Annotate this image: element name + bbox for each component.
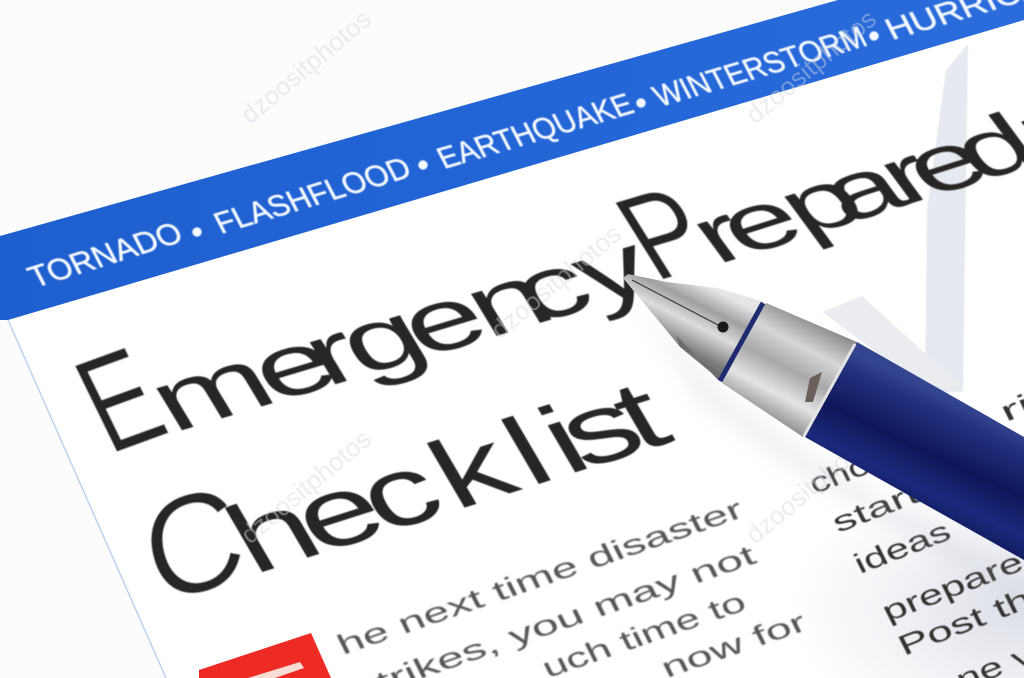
banner labels	[22, 0, 1024, 294]
pen nib	[623, 274, 765, 380]
text block: right column: prepare	[877, 547, 1024, 628]
watermarks: dzoositphotos	[235, 3, 377, 130]
text block: intro paragraph: he next time disaster	[332, 494, 749, 661]
pen shadow	[640, 300, 1024, 600]
drop cap: red box	[199, 633, 331, 678]
banner labels: WINTERSTORM	[647, 19, 872, 113]
text block: right column: ideas	[849, 516, 956, 580]
text block: right column: cho	[804, 450, 876, 500]
banner labels: EARTHQUAKE	[431, 87, 639, 175]
pen ring	[720, 303, 763, 381]
title: E	[53, 318, 186, 482]
text block: right column: start	[827, 478, 925, 539]
text block: right column: Post th	[893, 584, 1024, 662]
banner labels: FLASHFLOOD	[208, 150, 417, 240]
title: hecklist	[206, 360, 688, 594]
title: C	[128, 454, 259, 635]
watermarks: dzoositphotos	[235, 423, 377, 550]
watermarks: dzoositphotos	[740, 3, 882, 130]
watermarks: dzoositphotos	[740, 423, 882, 550]
panel: blue hazard banner	[0, 0, 1024, 320]
banner labels: TORNADO	[22, 215, 188, 294]
pen barrel	[805, 342, 1024, 560]
title: mergency	[130, 215, 671, 450]
watermarks	[235, 3, 882, 550]
text block: intro paragraph	[332, 494, 812, 678]
title: P	[592, 161, 737, 306]
pen collar	[722, 303, 857, 437]
ghost check mark	[822, 44, 968, 392]
icon: fountain pen	[623, 274, 1024, 560]
watermarks: dzoositphotos	[485, 218, 627, 345]
text block: right column	[804, 389, 1024, 678]
